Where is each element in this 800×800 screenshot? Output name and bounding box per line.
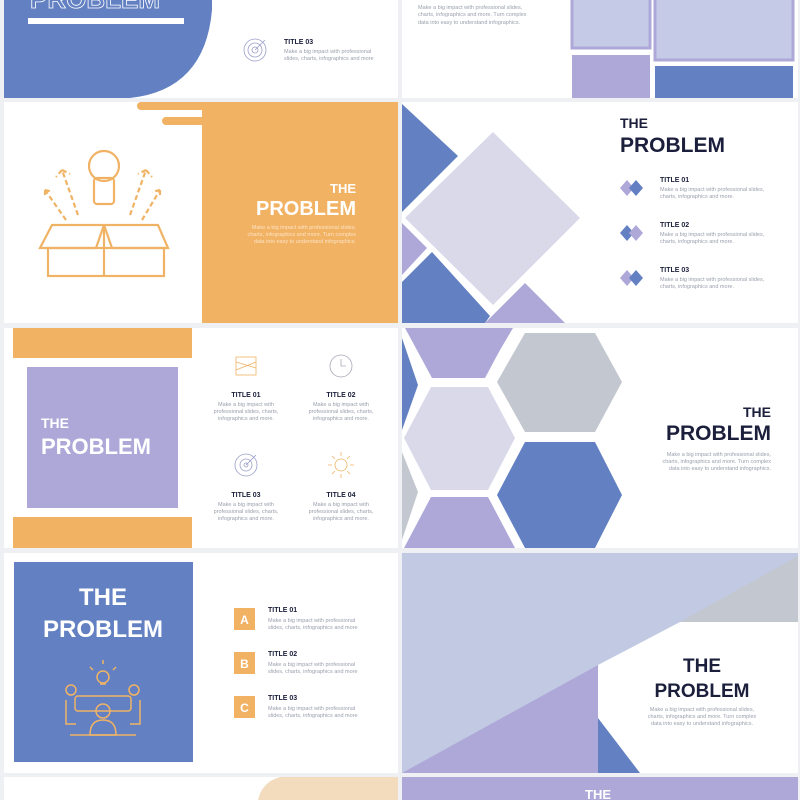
slide row4 left: Make a big impact with professional: [268, 662, 355, 668]
slide row1 right: data into easy to understand infographics.: [418, 20, 521, 26]
slide row4 right: PROBLEM: [654, 681, 750, 702]
slide row3 left: TITLE 03: [231, 492, 261, 499]
slide row4 right: charts, infographics and more. Turn complex: [648, 714, 757, 720]
slide row2 right: TITLE 02: [660, 222, 689, 229]
slide row3 right: charts, infographics and more. Turn complex: [662, 459, 771, 465]
slide row4 right: data into easy to understand infographics.: [651, 721, 754, 727]
slide row3 left: TITLE 01: [231, 392, 261, 399]
slide row3 left: infographics and more.: [313, 416, 369, 422]
slide row3 right: Make a big impact with professional slides,: [667, 452, 771, 458]
slide row3 left: professional slides, charts,: [309, 509, 374, 515]
slide row1 left: slides, charts, infographics and more: [284, 56, 374, 62]
slide row2 right: charts, infographics and more.: [660, 194, 734, 200]
icon: target: [244, 39, 266, 61]
slide row2 left: THE: [330, 181, 356, 196]
slide row2 right: charts, infographics and more.: [660, 239, 734, 245]
slide row4 left: Make a big impact with professional: [268, 706, 355, 712]
slide row3 left: [4, 328, 398, 548]
slide row1 right: charts, infographics and more. Turn complex: [418, 12, 527, 18]
slide row3 left: Make a big impact with: [313, 502, 369, 508]
slide row3 left: THE: [41, 415, 69, 431]
slide row3 left: Make a big impact with: [313, 402, 369, 408]
slide row3 left: professional slides, charts,: [214, 409, 279, 415]
slide row2 left: [4, 102, 398, 323]
slide row3 left: professional slides, charts,: [214, 509, 279, 515]
icon: meeting: [66, 660, 140, 735]
slide row4 left: Make a big impact with professional: [268, 618, 355, 624]
slide row3 left: Make a big impact with: [218, 502, 274, 508]
slide row3 left: infographics and more.: [218, 516, 274, 522]
slide row3 left: professional slides, charts,: [309, 409, 374, 415]
slide row1 right: [402, 0, 798, 98]
slide row1 left: TITLE 03: [284, 39, 313, 46]
slide row1 left: Make a big impact with professional: [284, 49, 371, 55]
slide row4 left: slides, charts, infographics and more: [268, 713, 358, 719]
slide row4 left: A: [240, 613, 249, 627]
slide row2 right: TITLE 01: [660, 177, 689, 184]
slide row3 left: Make a big impact with: [218, 402, 274, 408]
slide row3 left: TITLE 04: [326, 492, 356, 499]
slide row2 right: Make a big impact with professional slides,: [660, 277, 765, 283]
slide row2 left: PROBLEM: [256, 198, 356, 220]
slide row3 right: data into easy to understand infographics.: [669, 466, 771, 472]
slide row4 right: Make a big impact with professional slides,: [650, 707, 755, 713]
slide row2 right: PROBLEM: [620, 134, 725, 157]
slide row2 left: Make a big impact with professional slides,: [252, 225, 356, 231]
slide row4 left: slides, charts, infographics and more: [268, 625, 358, 631]
slide row3 right: [402, 328, 798, 548]
slide row4 left: B: [240, 657, 249, 671]
slide row2 left: charts, infographics and more. Turn complex: [247, 232, 356, 238]
slide row4 left: C: [240, 701, 249, 715]
slide row2 right: charts, infographics and more.: [660, 284, 734, 290]
slide row3 right: PROBLEM: [666, 422, 771, 445]
slide row3 left: infographics and more.: [218, 416, 274, 422]
slide row4 left: PROBLEM: [43, 616, 163, 643]
slide row2 right: [402, 102, 798, 323]
slide row2 right: TITLE 03: [660, 267, 689, 274]
slide row2 right: THE: [620, 115, 648, 131]
icon: lightbulb box: [40, 151, 168, 276]
slide row1 left: [4, 0, 398, 98]
slide row2 left: data into easy to understand infographics.: [254, 239, 356, 245]
slide row5 left: [4, 777, 398, 800]
slide row4 left: TITLE 02: [268, 651, 297, 658]
slide row4 left: TITLE 01: [268, 607, 297, 614]
slide row1 right: Make a big impact with professional slides,: [418, 5, 523, 11]
slide row4 right: [402, 553, 798, 773]
slide row5 right: [402, 777, 798, 800]
slide row4 left: [4, 553, 398, 773]
slide row4 right: THE: [683, 656, 721, 677]
slide row2 right: Make a big impact with professional slides,: [660, 232, 765, 238]
slide row3 left: PROBLEM: [41, 434, 151, 459]
slide row4 left: slides, charts, infographics and more: [268, 669, 358, 675]
slide row3 left: infographics and more.: [313, 516, 369, 522]
slide row3 left: TITLE 02: [326, 392, 356, 399]
slide row4 left: THE: [79, 584, 127, 611]
slide row3 right: THE: [743, 404, 771, 420]
slide row2 right: Make a big impact with professional slides,: [660, 187, 765, 193]
slide row4 left: TITLE 03: [268, 695, 297, 702]
